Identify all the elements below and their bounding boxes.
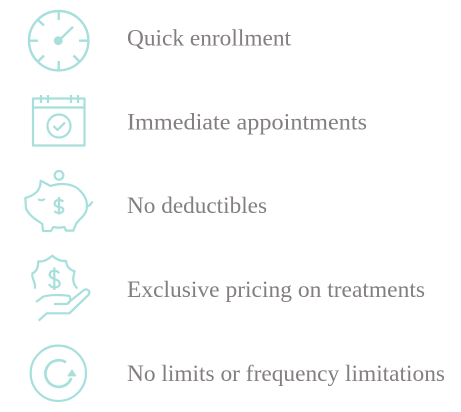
icon: clock (29, 11, 88, 70)
icon: renew circle (31, 346, 86, 401)
text: exclusive pricing on treatments: Exclusive pricing on treatments (127, 277, 425, 302)
text: quick enrollment: Quick enrollment (127, 26, 292, 50)
text: no limits: No limits or frequency limitations (127, 361, 445, 386)
icon: calendar (33, 95, 84, 146)
icon: piggy bank (25, 171, 92, 231)
text: immediate appointments: Immediate appointments (127, 110, 367, 134)
text: no deductibles: No deductibles (127, 193, 267, 218)
icon: hand with dollar badge (32, 256, 89, 321)
